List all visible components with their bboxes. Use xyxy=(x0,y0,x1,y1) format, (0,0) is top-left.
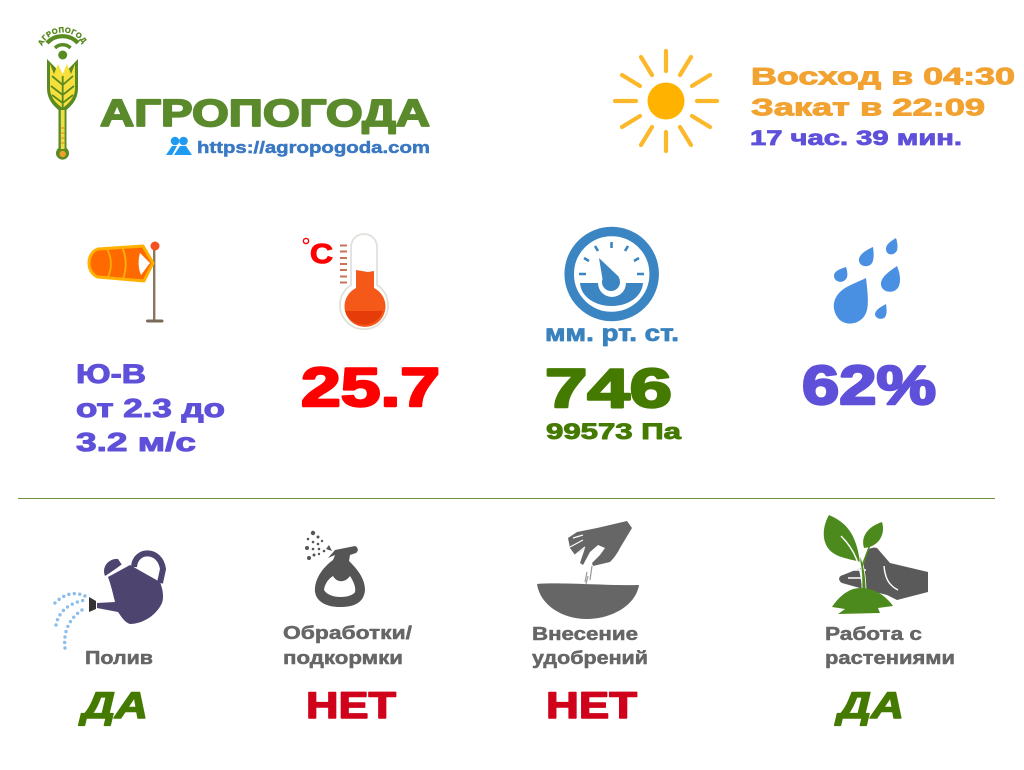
icon: plant in hand xyxy=(824,515,928,614)
temperature value: 25.7 xyxy=(301,356,440,418)
pressure value: 746 xyxy=(545,357,672,419)
label line 2: подкормки xyxy=(283,648,403,668)
icon: water drops xyxy=(834,238,900,324)
day length: 17 час. 39 мин. xyxy=(750,127,962,150)
panel: plant work xyxy=(824,515,955,726)
label line 1: Внесение xyxy=(532,624,638,644)
website url: https://agropogoda.com xyxy=(197,138,430,157)
label line 1: Обработки/ xyxy=(283,623,412,643)
wind speed line 1: от 2.3 до xyxy=(76,393,225,423)
icon: windsock xyxy=(89,242,164,322)
panel: pressure xyxy=(545,232,682,444)
logo wordmark: АГРОПОГОДА xyxy=(100,93,430,135)
sunrise and sunset text xyxy=(750,64,1015,150)
icon: sun xyxy=(615,51,717,151)
unit celsius: C xyxy=(310,238,333,269)
icon: watering can xyxy=(55,553,163,648)
panel: humidity xyxy=(802,238,936,416)
status yes: ДА xyxy=(834,685,904,726)
panel: fertilizer xyxy=(532,521,648,726)
pressure unit: мм. рт. ст. xyxy=(545,320,679,346)
wind direction: Ю-В xyxy=(76,359,146,389)
label: Полив xyxy=(85,648,153,668)
sunrise time: Восход в 04:30 xyxy=(751,64,1015,90)
logo block xyxy=(38,26,430,160)
sunset time: Закат в 22:09 xyxy=(751,94,985,122)
status no: НЕТ xyxy=(306,685,396,726)
label line 2: удобрений xyxy=(532,648,648,668)
icon: hand over soil xyxy=(537,521,639,619)
panel: wind xyxy=(76,242,225,457)
panel: treatments xyxy=(283,531,412,726)
panel: watering xyxy=(55,553,163,726)
icon: spray bottle xyxy=(305,531,365,607)
degree mark xyxy=(303,238,309,244)
label line 1: Работа с xyxy=(825,624,922,644)
wind speed line 2: 3.2 м/с xyxy=(76,427,196,457)
pressure in pascals: 99573 Па xyxy=(546,419,682,444)
divider xyxy=(18,498,995,500)
icon: thermometer xyxy=(340,234,388,329)
icon: wheat logo xyxy=(38,26,87,160)
label line 2: растениями xyxy=(825,648,955,668)
status yes: ДА xyxy=(78,685,148,726)
status no: НЕТ xyxy=(546,685,637,726)
panel: temperature xyxy=(301,234,440,418)
icon: gauge xyxy=(569,232,654,316)
humidity value: 62% xyxy=(802,354,936,416)
icon: two people xyxy=(166,137,192,155)
